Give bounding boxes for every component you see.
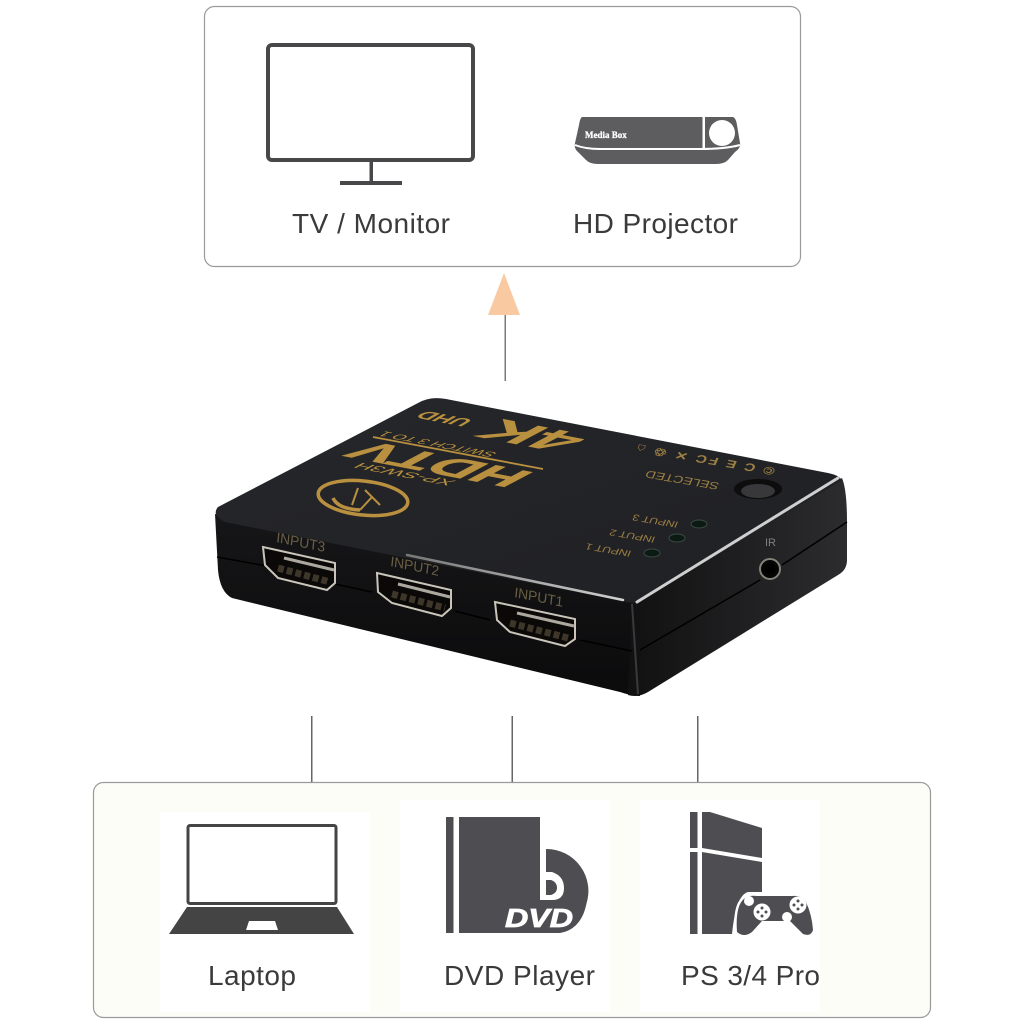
label: HD Projector: HD Projector <box>573 208 738 239</box>
HDMI port 2 <box>377 573 451 616</box>
icon: HD projector: Media Box <box>585 130 627 140</box>
product: HDMI switch <box>215 398 847 696</box>
label: PS 3/4 Pro: PS 3/4 Pro <box>681 960 820 991</box>
icon: HD projector <box>575 117 740 164</box>
text: INPUT1: INPUT1 <box>514 584 564 610</box>
icon: DVD disc case <box>446 817 588 933</box>
printed small labels <box>584 442 777 558</box>
label: TV / Monitor: TV / Monitor <box>292 208 450 239</box>
top face <box>216 398 841 603</box>
label: Laptop: Laptop <box>208 960 296 991</box>
edge highlights <box>637 478 838 602</box>
text: certification marks: © C E FC ✕ ♲ ⌂ <box>634 442 777 477</box>
selector button <box>734 479 782 499</box>
text: 4K: 4K <box>461 413 602 458</box>
panel: input sources <box>94 782 930 1018</box>
text: INPUT 1: INPUT 1 <box>584 541 633 558</box>
text: INPUT 3: INPUT 3 <box>631 512 680 529</box>
text: HDTV: HDTV <box>333 436 545 492</box>
icon: TV monitor <box>268 45 473 185</box>
text: INPUT3: INPUT3 <box>276 529 326 555</box>
HDMI port 1 <box>495 602 575 646</box>
text: UHD: UHD <box>411 408 478 428</box>
text: INPUT2: INPUT2 <box>390 553 440 579</box>
label: DVD Player: DVD Player <box>444 960 595 991</box>
panel: output devices <box>204 6 800 266</box>
IR label: IR <box>765 537 776 549</box>
right side face <box>628 478 847 696</box>
icon: DVD disc case: DVD <box>505 903 573 933</box>
IR jack <box>760 559 780 579</box>
HDMI port 3 <box>263 547 335 590</box>
connector lines to inputs <box>311 716 698 784</box>
arrow: output to display <box>488 273 520 381</box>
logo <box>316 476 410 520</box>
front face <box>215 514 640 696</box>
icon: laptop <box>169 826 354 934</box>
text: SELECTED: SELECTED <box>643 468 721 492</box>
printed divider <box>373 437 543 469</box>
icon: games console and controller <box>690 812 813 935</box>
status LEDs <box>644 520 707 557</box>
text: INPUT 2: INPUT 2 <box>608 527 657 544</box>
text: XP-SW3H: XP-SW3H <box>350 461 460 487</box>
front port labels <box>276 529 564 610</box>
printed brand text <box>333 408 602 492</box>
text: SWITCH 3 TO 1: SWITCH 3 TO 1 <box>375 430 501 458</box>
